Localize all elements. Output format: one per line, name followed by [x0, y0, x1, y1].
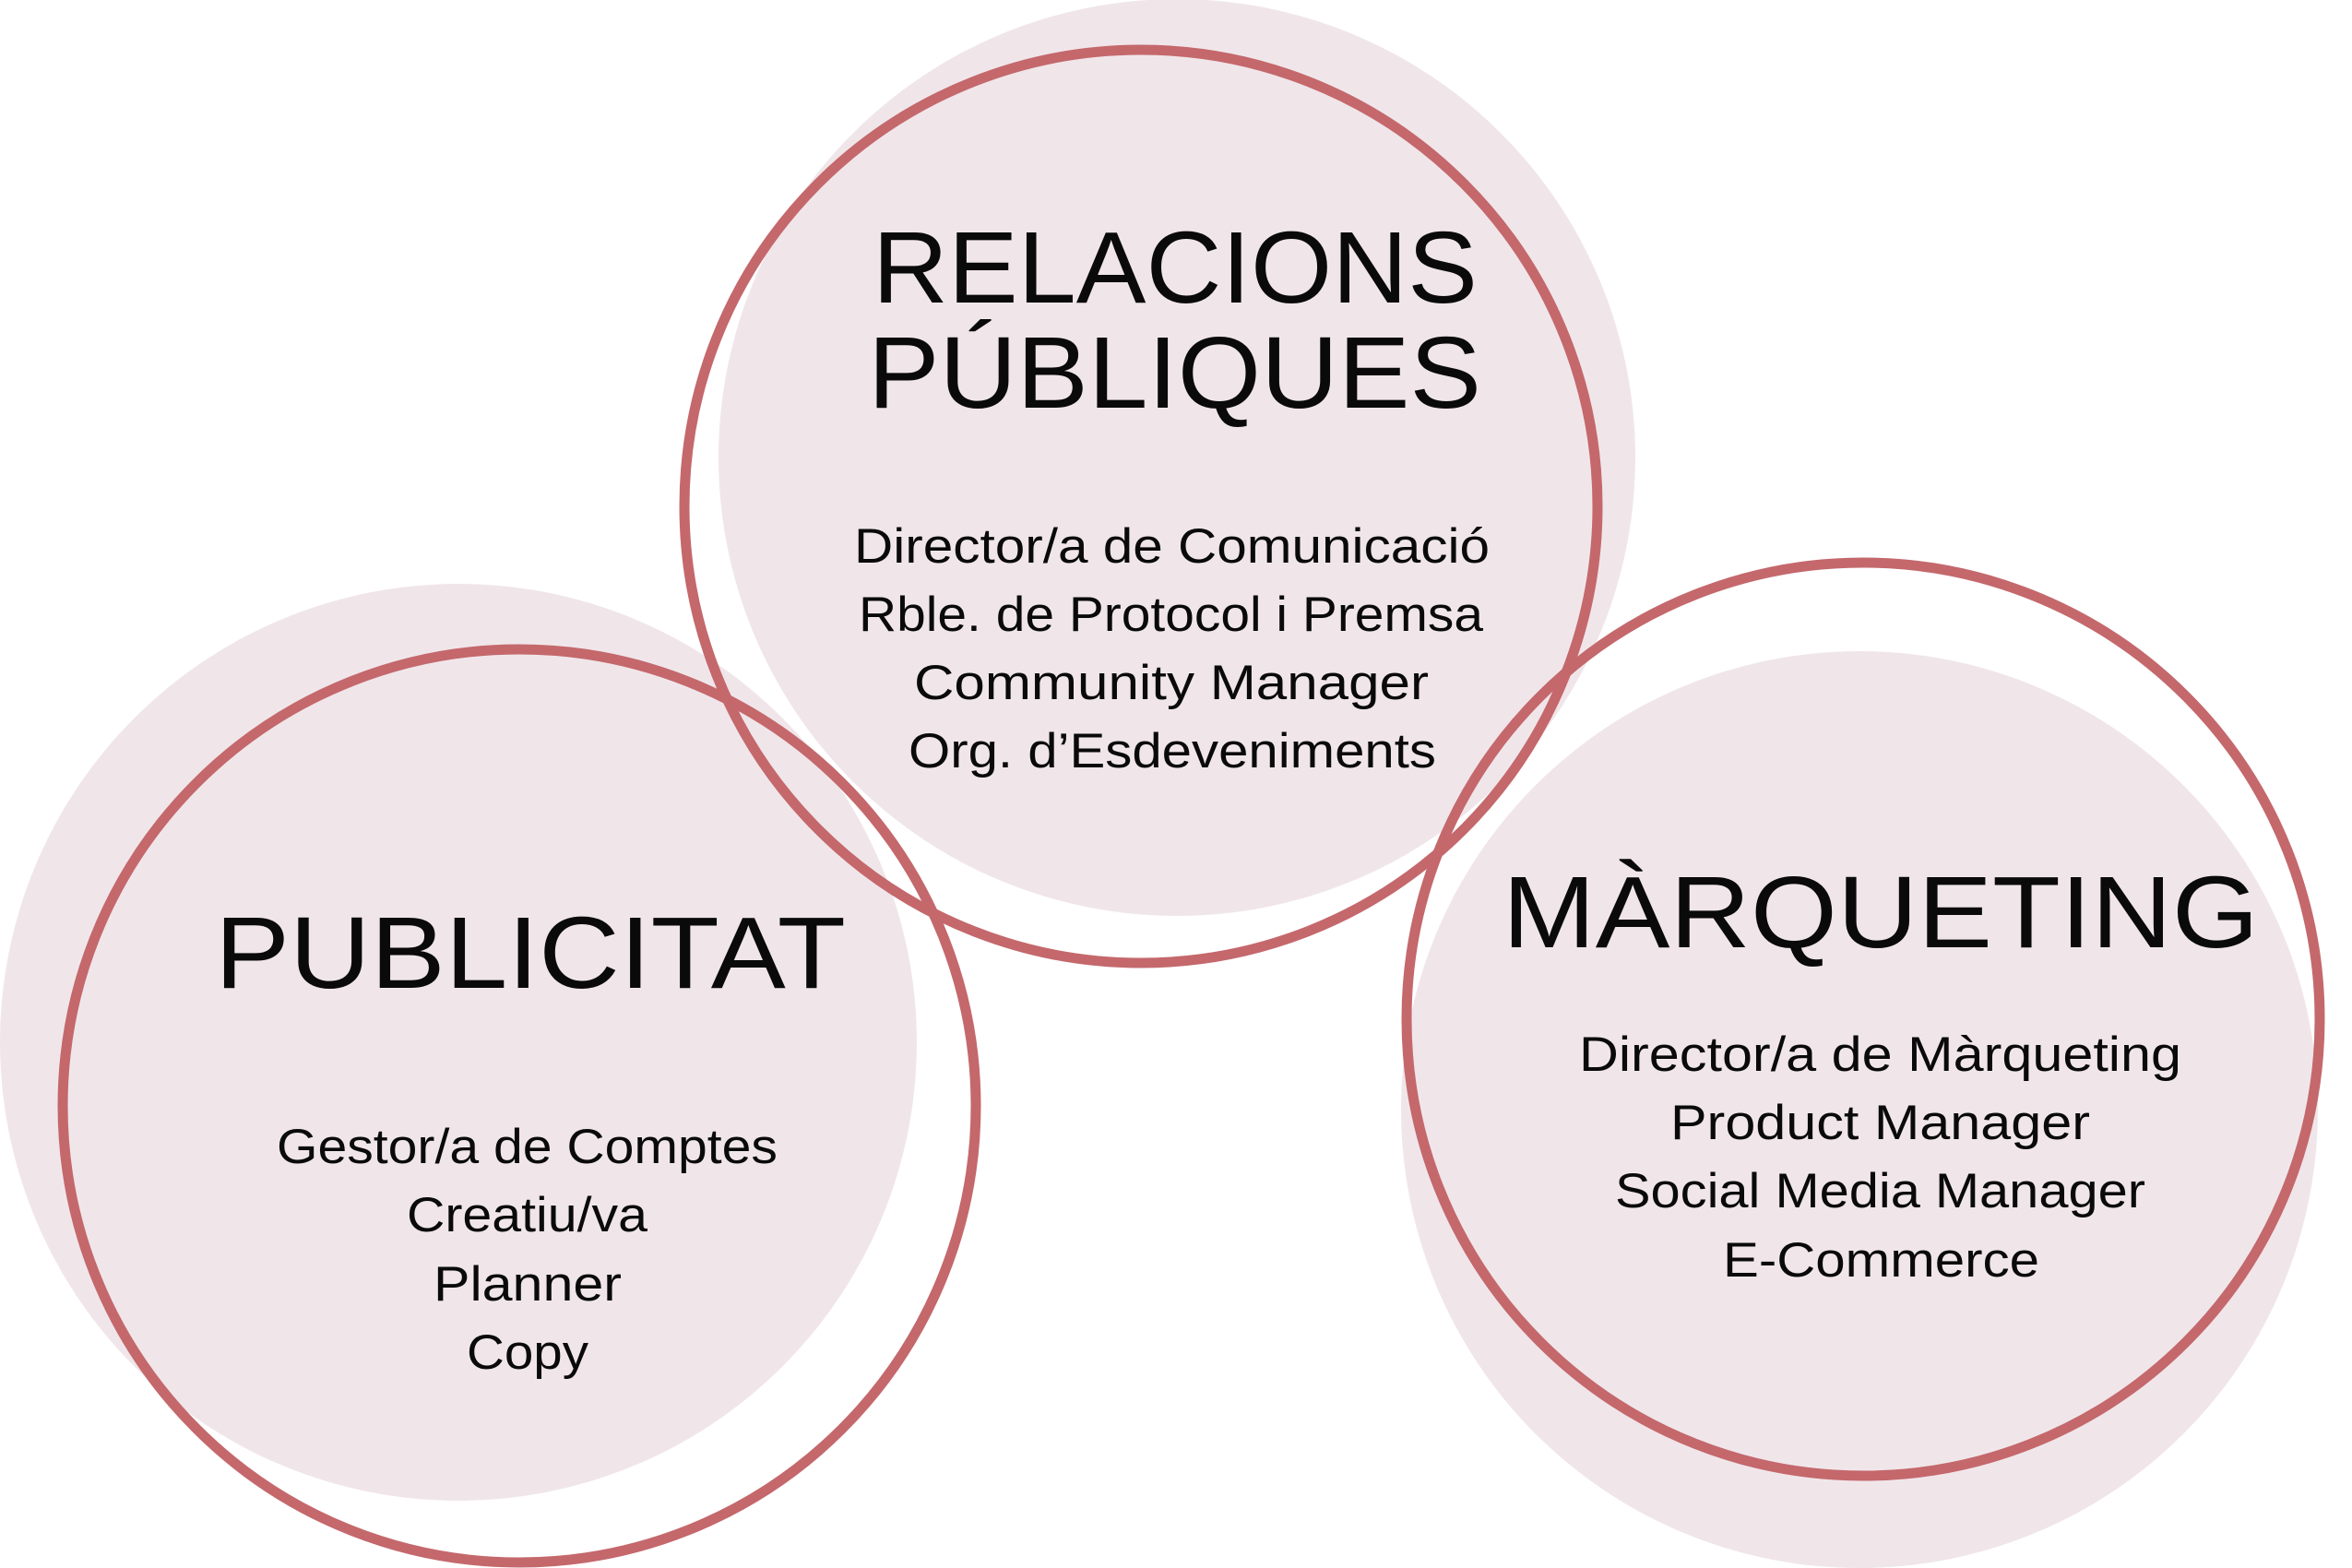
role list: màrqueting: Social Media Manager — [1615, 1164, 2145, 1218]
text block: publicitat — [215, 897, 846, 1380]
role list: publicitat: Planner — [434, 1257, 622, 1312]
role list: relacions públiques: Community Manager — [914, 656, 1429, 710]
ring: relacions públiques — [684, 50, 1598, 963]
role list: publicitat — [277, 1120, 778, 1380]
text block: relacions públiques — [854, 211, 1490, 778]
disc: publicitat — [0, 584, 917, 1501]
role list: relacions públiques: Org. d’Esdeveniments — [909, 724, 1436, 778]
role list: màrqueting: Product Manager — [1670, 1096, 2090, 1150]
role list: màrqueting — [1579, 1028, 2181, 1288]
heading: relacions públiques: RELACIONS — [873, 211, 1478, 325]
role list: publicitat: Gestor/a de Comptes — [277, 1120, 778, 1174]
role list: màrqueting: E-Commerce — [1723, 1233, 2039, 1288]
ring: publicitat — [63, 649, 976, 1562]
heading: publicitat: PUBLICITAT — [215, 897, 846, 1010]
ring: màrqueting — [1407, 563, 2320, 1476]
heading: relacions públiques: PÚBLIQUES — [868, 316, 1481, 430]
disc: relacions públiques — [719, 0, 1635, 916]
role list: publicitat: Creatiu/va — [407, 1188, 648, 1242]
heading: relacions públiques — [868, 211, 1481, 430]
role list: relacions públiques: Director/a de Comunicació — [854, 519, 1490, 574]
disc: màrqueting — [1401, 651, 2318, 1568]
role list: màrqueting: Director/a de Màrqueting — [1579, 1028, 2181, 1082]
role list: publicitat: Copy — [467, 1325, 589, 1380]
role list: relacions públiques — [854, 519, 1490, 778]
role list: relacions públiques: Rble. de Protocol i Premsa — [859, 588, 1484, 642]
heading: màrqueting: MÀRQUETING — [1503, 856, 2259, 969]
text block: màrqueting — [1503, 856, 2259, 1288]
